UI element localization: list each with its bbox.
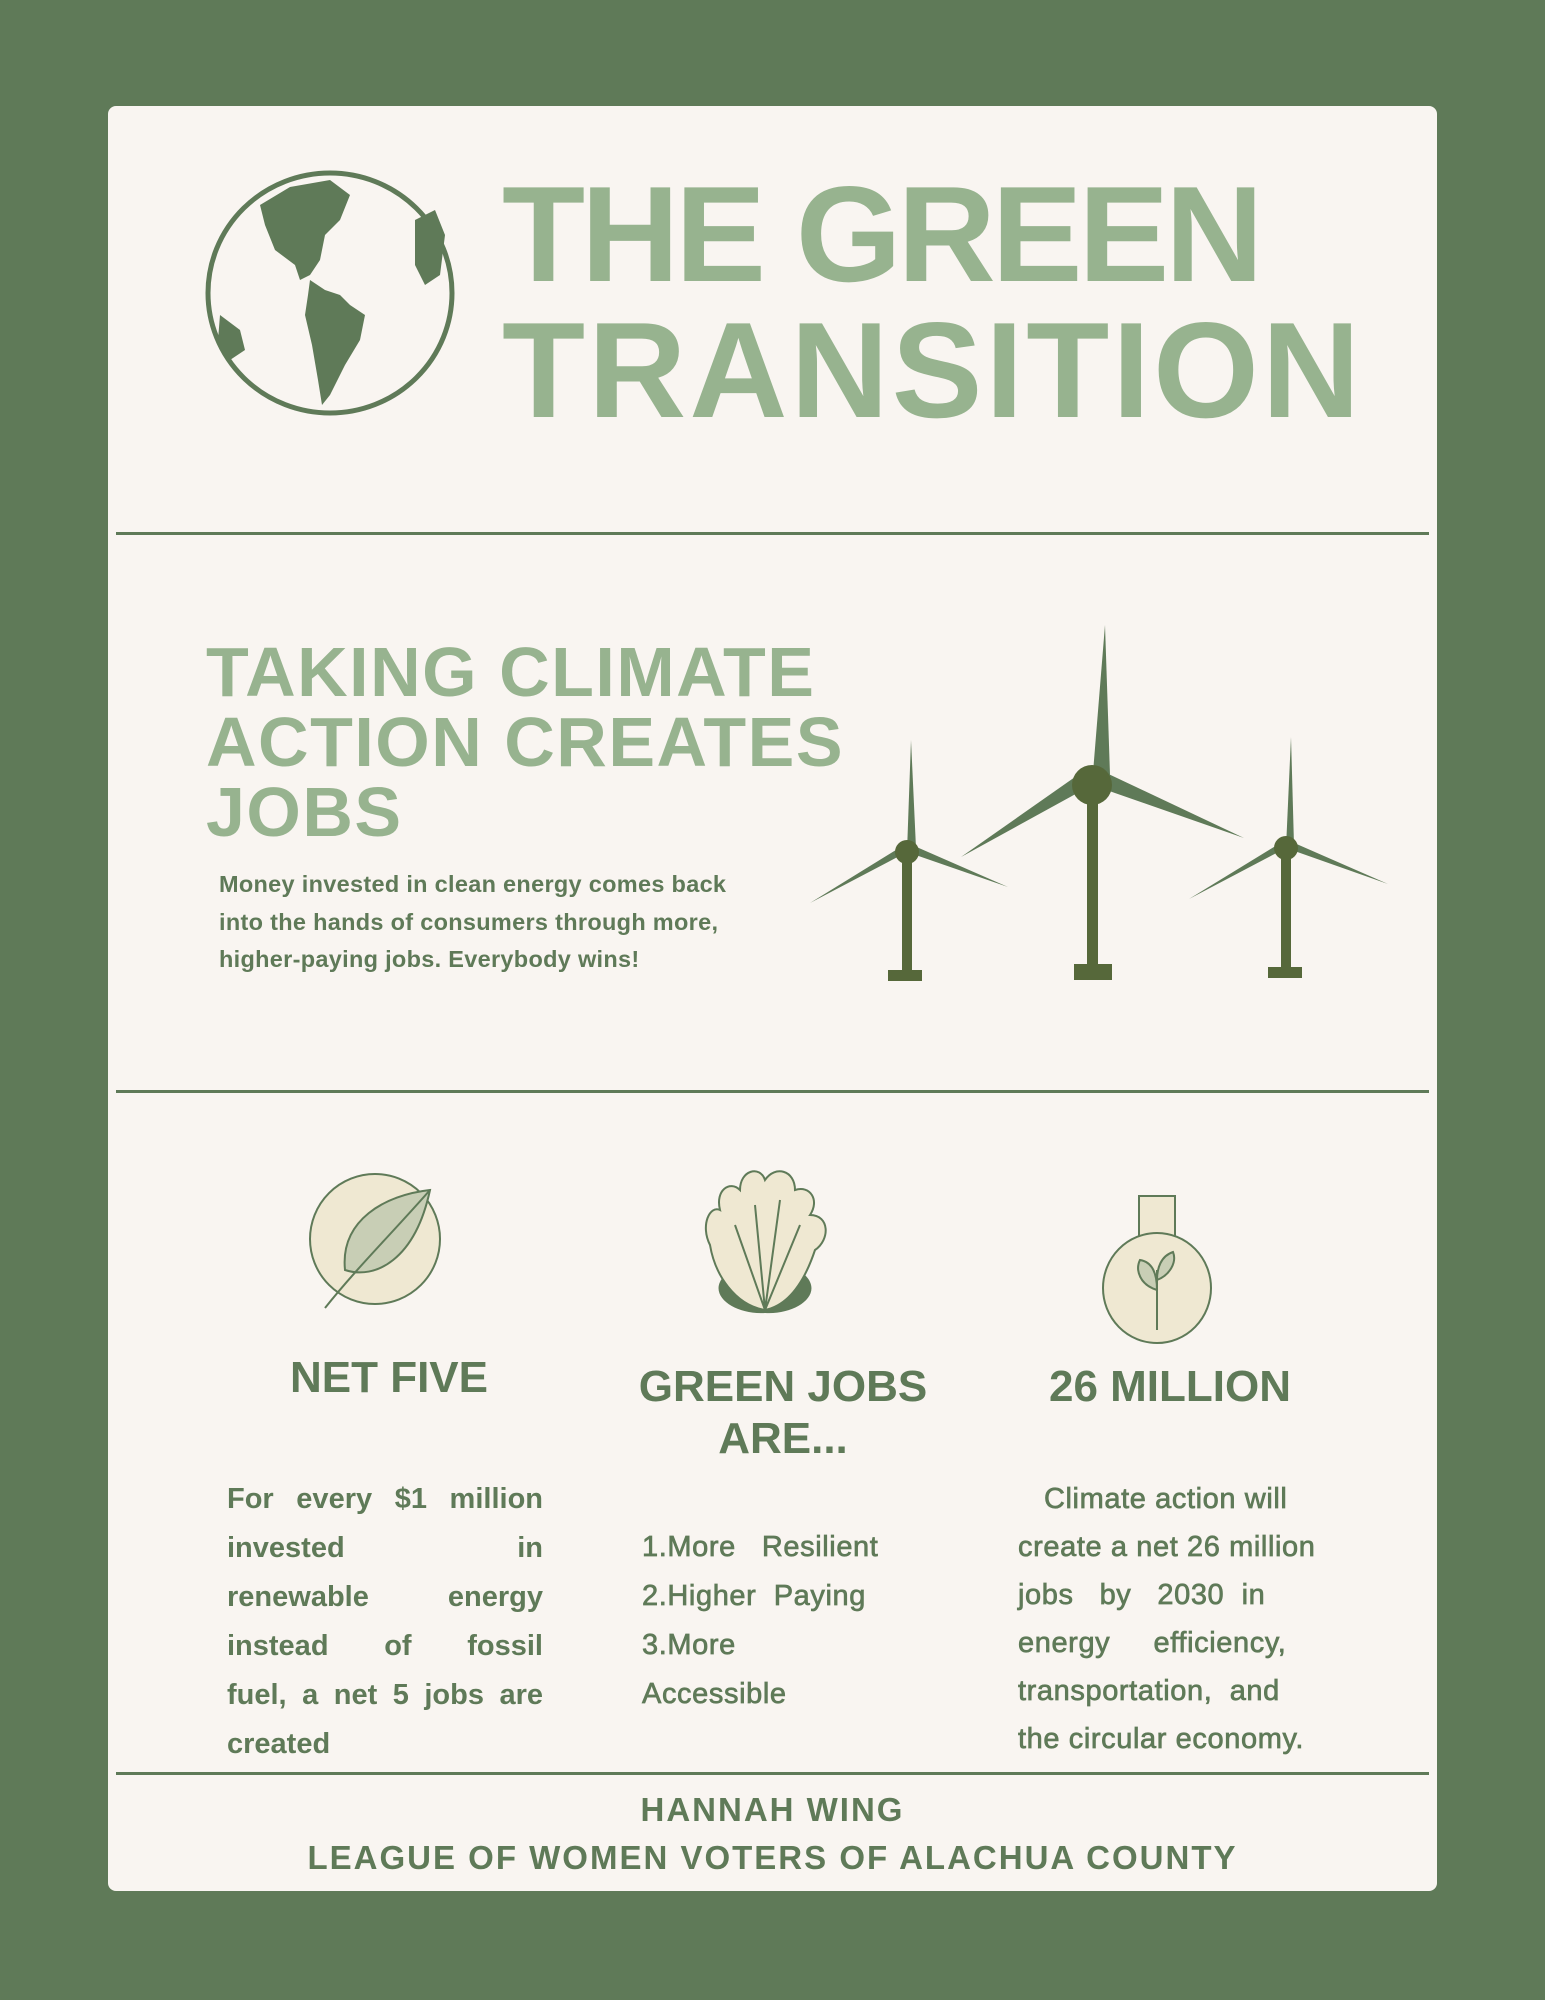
text: 26 million: jobs by 2030 in — [1018, 1579, 1265, 1611]
icon: leaf — [309, 1173, 441, 1309]
text: net five: fuel, a net 5 jobs are — [227, 1679, 543, 1711]
text: green jobs list — [642, 1531, 878, 1710]
title: TRANSITION — [502, 294, 1363, 446]
subheading: TAKING CLIMATE — [206, 633, 815, 711]
title — [502, 158, 1363, 446]
text: green jobs list: 1.More Resilient — [642, 1531, 878, 1563]
icon: lettuce — [704, 1170, 827, 1314]
text: net five — [227, 1483, 543, 1760]
paragraph — [219, 871, 726, 972]
heading: green jobs are: GREEN JOBS — [639, 1362, 927, 1411]
text: net five: instead of fossil — [227, 1630, 543, 1662]
title: THE GREEN — [502, 158, 1259, 310]
text: net five: created — [227, 1728, 330, 1760]
paragraph: higher-paying jobs. Everybody wins! — [219, 946, 640, 972]
heading: green jobs are: ARE... — [718, 1414, 848, 1463]
text: net five: invested in — [227, 1532, 543, 1564]
text: green jobs list: 2.Higher Paying — [642, 1580, 866, 1612]
icon: flask — [1102, 1195, 1212, 1344]
text: net five: For every $1 million — [227, 1483, 543, 1515]
subheading: JOBS — [206, 773, 403, 851]
text: 26 million: energy efficiency, — [1018, 1627, 1286, 1659]
paragraph: Money invested in clean energy comes back — [219, 871, 726, 897]
heading: net five: NET FIVE — [290, 1353, 488, 1402]
text: 26 million — [1016, 1483, 1316, 1755]
card — [108, 106, 1437, 1891]
heading: 26 million: 26 MILLION — [1049, 1362, 1291, 1411]
text: 26 million: create a net 26 million — [1018, 1531, 1316, 1563]
text: green jobs list: 3.More — [642, 1629, 736, 1661]
footer: HANNAH WING — [640, 1791, 904, 1828]
text: 26 million: the circular economy. — [1018, 1723, 1304, 1755]
footer — [307, 1791, 1238, 1876]
subheading — [206, 633, 844, 851]
icon: wind turbines — [810, 626, 1388, 981]
footer: LEAGUE OF WOMEN VOTERS OF ALACHUA COUNTY — [307, 1839, 1238, 1876]
icon: globe — [206, 170, 454, 416]
text: 26 million: transportation, and — [1018, 1675, 1280, 1707]
heading: green jobs are — [639, 1362, 927, 1463]
text: green jobs list: Accessible — [642, 1678, 787, 1710]
paragraph: into the hands of consumers through more, — [219, 908, 718, 934]
text: 26 million: Climate action will — [1044, 1483, 1287, 1515]
text: net five: renewable energy — [227, 1581, 543, 1613]
subheading: ACTION CREATES — [206, 703, 844, 781]
